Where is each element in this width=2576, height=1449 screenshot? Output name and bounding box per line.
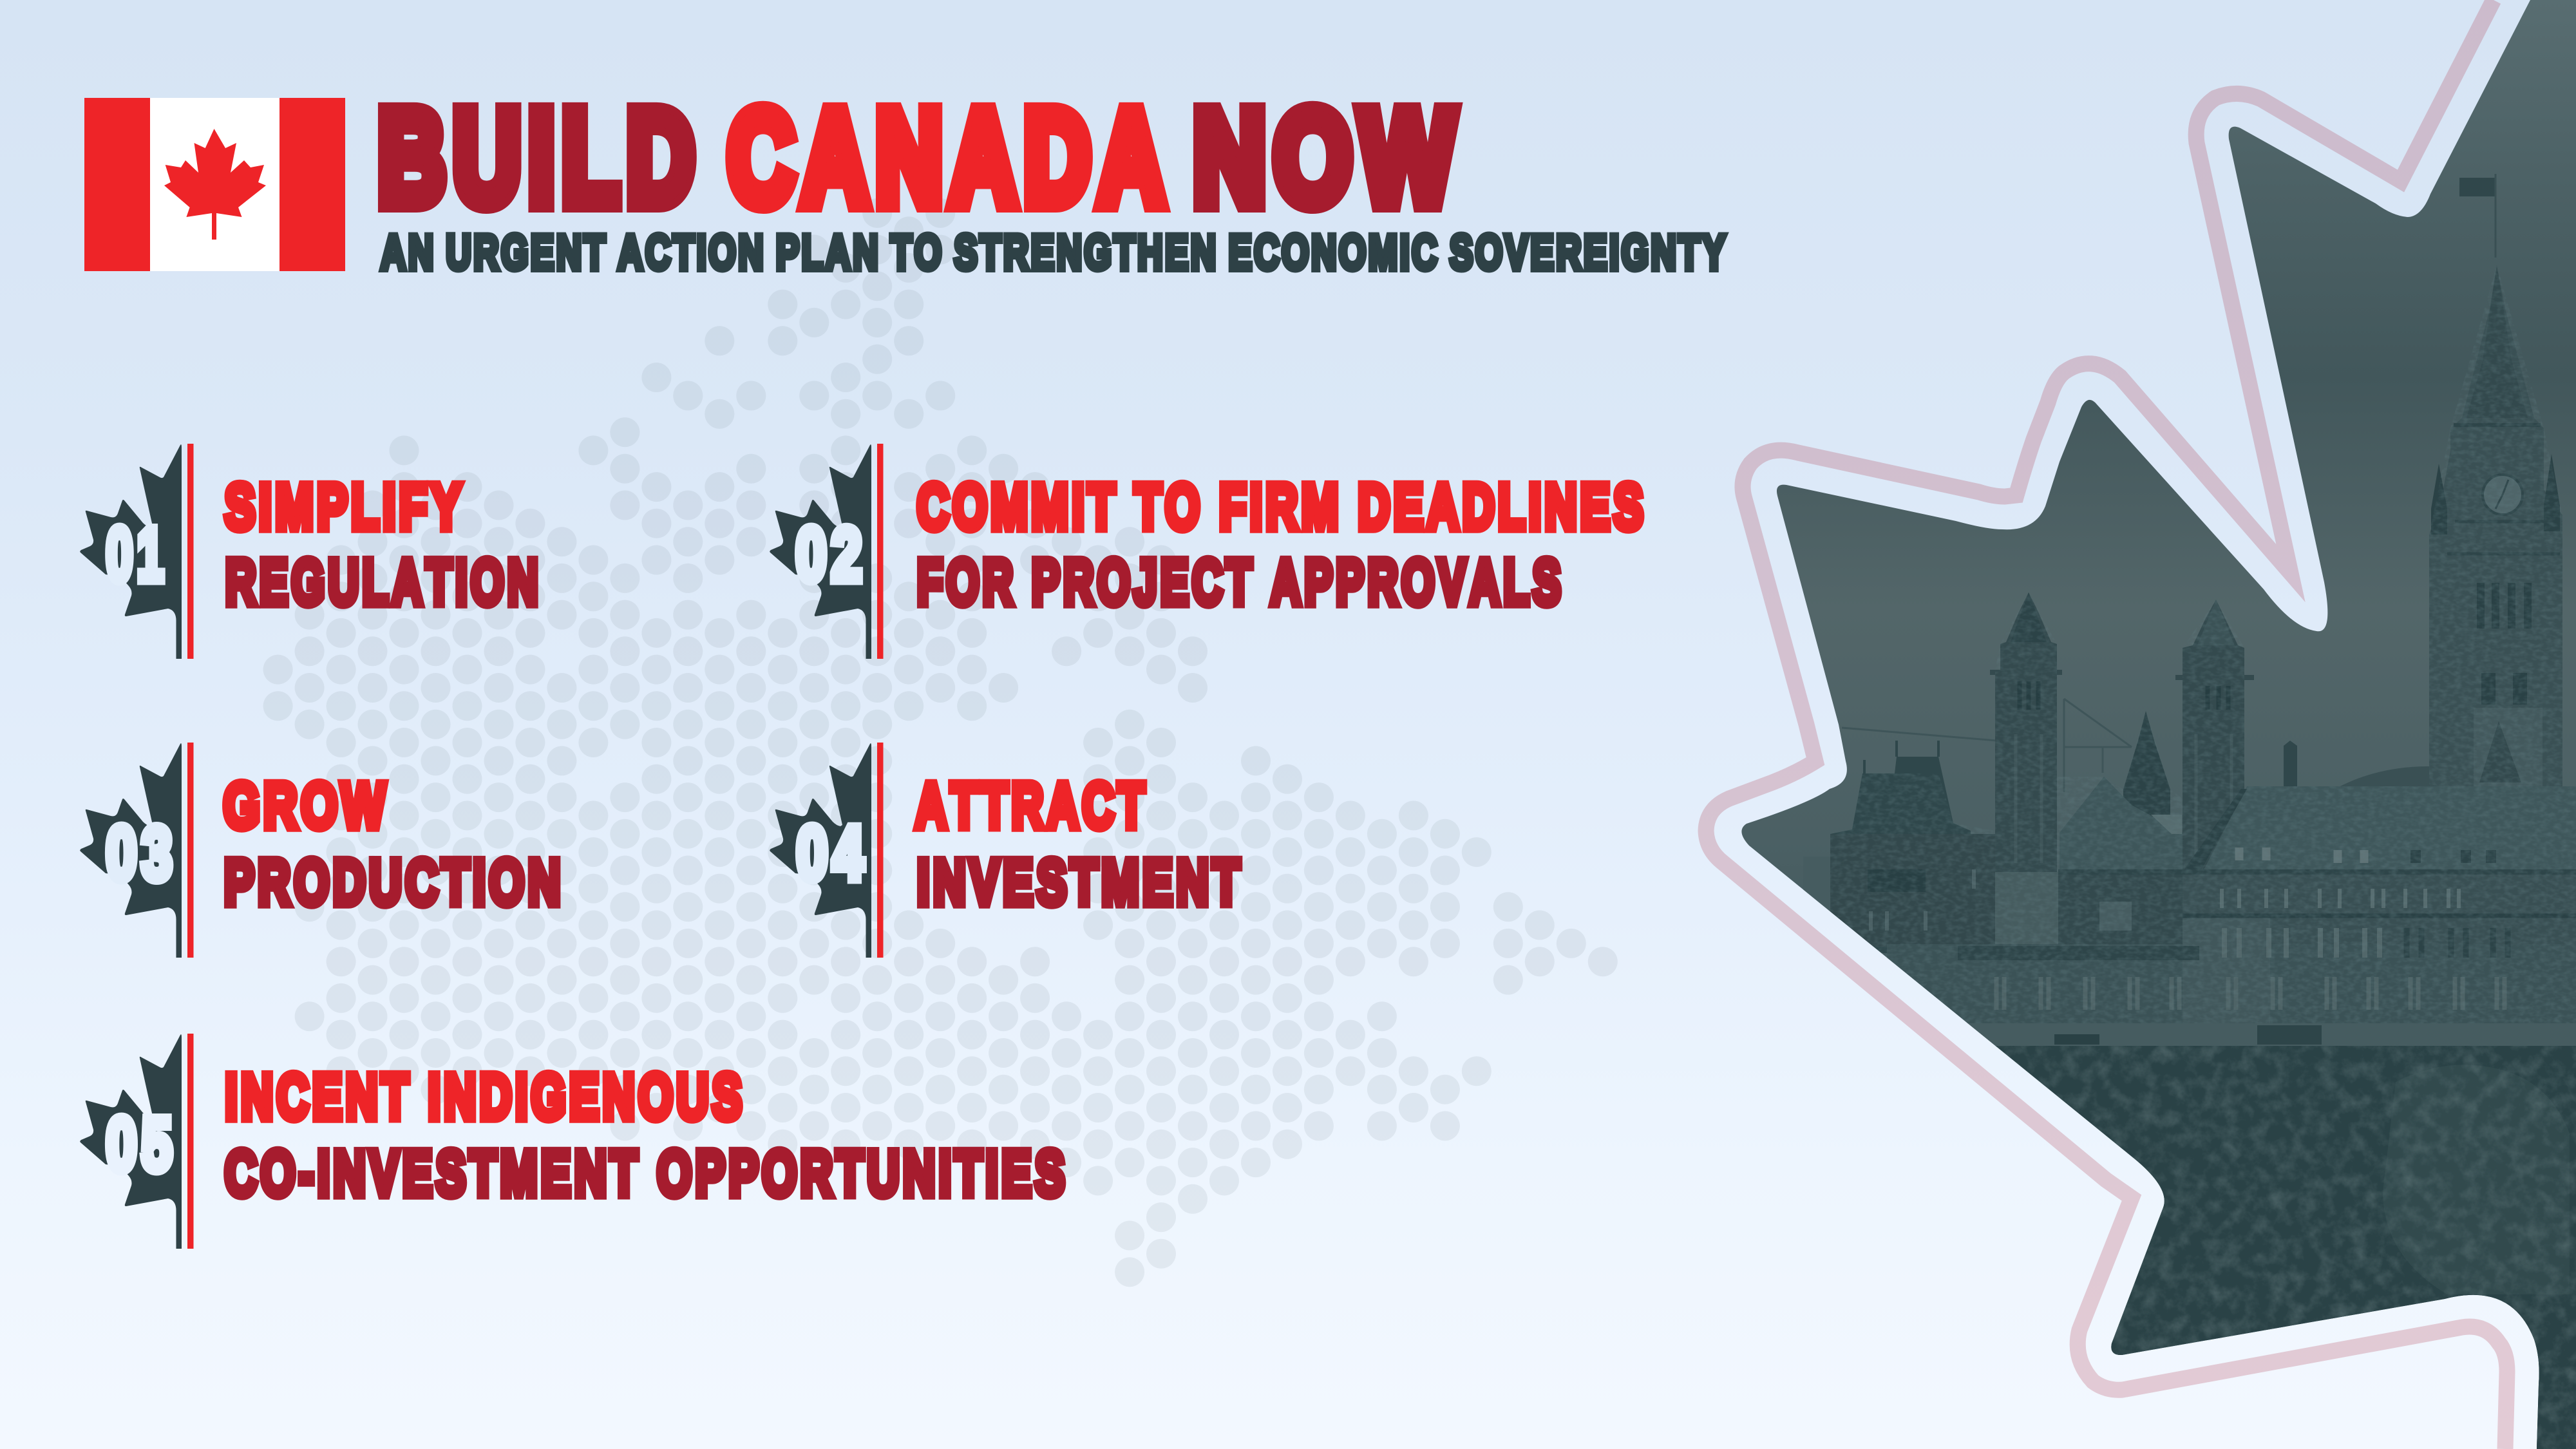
item text: grow production: [223, 770, 564, 918]
action item 03: [80, 743, 564, 958]
west block left wing: [1830, 741, 1995, 953]
icon: half maple leaf 05: 05: [106, 1102, 177, 1186]
icon: half maple leaf 04: [770, 743, 884, 958]
item text: grow production: PRODUCTION: [224, 846, 564, 918]
icon: half maple leaf 05: [80, 1034, 193, 1249]
centre block walls: [2183, 872, 2576, 944]
icon: half maple leaf 02: [770, 444, 884, 659]
distant low building: [1803, 889, 1841, 921]
main copper roof: [2200, 786, 2576, 877]
item text: attract investment: [915, 770, 1244, 918]
icon: half maple leaf 03: 03: [106, 811, 177, 895]
roof dormer windows: [2239, 848, 2364, 863]
centre pitched roof: [2060, 777, 2183, 872]
action item 01: [80, 444, 542, 659]
gothic windows upper row: [2222, 889, 2459, 908]
item text: simplify regulation: [225, 471, 542, 618]
peace tower: [2429, 174, 2562, 799]
icon: half maple leaf 03: [80, 743, 193, 958]
icon: half maple leaf 02: 02: [796, 512, 867, 596]
item text: attract investment: INVESTMENT: [917, 846, 1244, 918]
item text: simplify regulation: REGULATION: [225, 546, 542, 618]
construction fence strip: [1919, 1023, 2576, 1046]
item text: indigenous co-investment: CO-INVESTMENT OPPORTUNITIES: [225, 1137, 1068, 1209]
crane and wires: [1842, 699, 2132, 792]
west tower: [1990, 592, 2062, 872]
chimney: [2284, 741, 2297, 786]
subtitle: AN URGENT ACTION PLAN TO STRENGTHEN ECONOMIC SOVEREIGNTY: [381, 225, 1728, 280]
photo sky: [1707, 0, 2576, 1449]
dotted map of Canada: [278, 213, 1603, 1273]
item text: firm deadlines: FOR PROJECT APPROVALS: [917, 546, 1564, 618]
item text: indigenous co-investment: INCENT INDIGENOUS: [225, 1061, 746, 1132]
title: CANADA: [728, 83, 1172, 232]
building stone grain: [1829, 265, 2576, 1046]
title: BUILD: [378, 83, 702, 232]
item text: simplify regulation: SIMPLIFY: [225, 471, 465, 542]
east tower: [2175, 600, 2254, 872]
item text: grow production: GROW: [223, 770, 389, 841]
pink maple leaf outline: [1706, 0, 2507, 1449]
item text: attract investment: ATTRACT: [915, 770, 1148, 841]
gothic windows middle row: [2224, 928, 2380, 958]
item text: firm deadlines: COMMIT TO FIRM DEADLINES: [917, 471, 1647, 542]
title: NOW: [1193, 83, 1463, 232]
small centre spire: [2123, 711, 2170, 817]
icon: half maple leaf 01: 01: [106, 512, 168, 596]
gothic windows lower row: [1996, 977, 2505, 1010]
tree line: [1868, 1046, 2576, 1449]
icon: half maple leaf 01: [80, 444, 193, 659]
far dome behind the main roof: [2340, 766, 2429, 786]
action item 04: [770, 743, 1244, 958]
item text: indigenous co-investment: [225, 1061, 1068, 1209]
title: [378, 83, 1463, 232]
action item 05: [80, 1034, 1068, 1249]
item text: firm deadlines: [917, 471, 1647, 618]
icon: flag maple leaf: [164, 129, 266, 240]
icon: half maple leaf 04: 04: [797, 811, 869, 895]
action item 02: [770, 444, 1647, 659]
photo panel: Parliament Hill inside maple leaf: [1707, 0, 2576, 1449]
flag of Canada: [84, 98, 345, 271]
